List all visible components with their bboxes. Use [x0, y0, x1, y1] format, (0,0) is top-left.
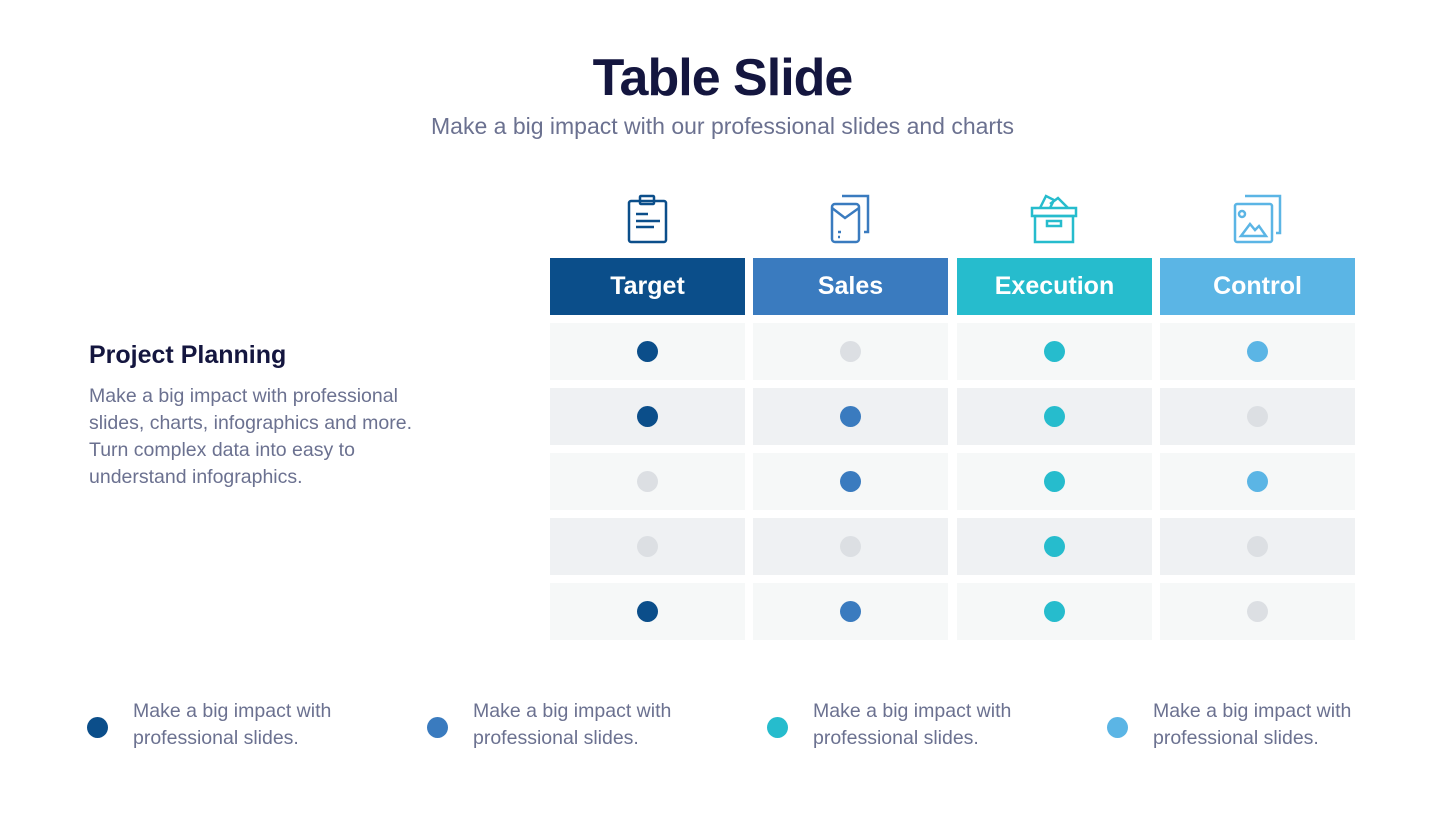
heading: project planning: Project Planning [89, 341, 286, 369]
title: Table Slide [593, 49, 852, 107]
legend item 1: Make a big impact with [133, 700, 331, 722]
legend item 3 [767, 700, 1011, 749]
table header: Sales [818, 272, 883, 300]
legend item 3: professional slides. [813, 727, 979, 749]
legend item 3: Make a big impact with [813, 700, 1011, 722]
legend [87, 700, 1351, 749]
legend item 4: Make a big impact with [1153, 700, 1351, 722]
row 5 [550, 583, 745, 640]
text block: description: Make a big impact with professional slides, charts, infographics and more. Turn complex data into easy to understand infographics. [89, 385, 412, 488]
subtitle: Make a big impact with our professional slides and charts [431, 113, 1014, 139]
legend item 1: professional slides. [133, 727, 299, 749]
row 3 [550, 453, 745, 510]
legend item 4 [1107, 700, 1351, 749]
row 4 [550, 518, 745, 575]
table header: Control [1213, 272, 1302, 300]
legend item 2: Make a big impact with [473, 700, 671, 722]
table body [550, 323, 1355, 640]
table header: Execution [995, 272, 1114, 300]
row 2 [550, 388, 745, 445]
icon: envelope phone [830, 194, 870, 244]
table header: Target [610, 272, 685, 300]
legend item 1 [87, 700, 331, 749]
legend item 4: professional slides. [1153, 727, 1319, 749]
table header [550, 258, 1355, 315]
row 1 [550, 323, 745, 380]
icon: images [1234, 194, 1282, 244]
icon: box [1030, 194, 1078, 244]
legend item 2: professional slides. [473, 727, 639, 749]
legend item 2 [427, 700, 671, 749]
icon: clipboard [628, 194, 668, 244]
